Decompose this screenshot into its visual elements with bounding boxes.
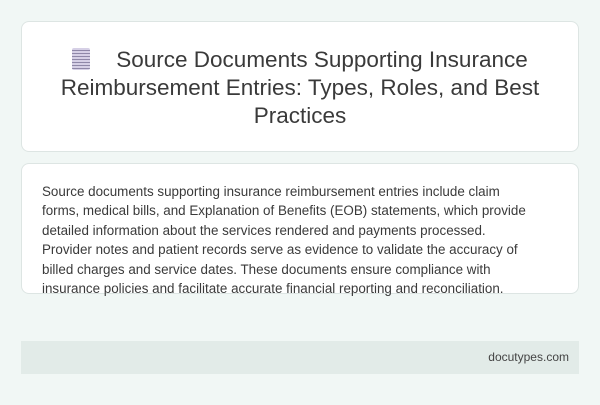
description text: detailed information about the services rendered and payments processed. [42,223,486,238]
icon: receipt [72,48,90,70]
description text [42,184,526,296]
footer [21,341,579,374]
description text: Provider notes and patient records serve as evidence to validate the accuracy of [42,242,518,257]
title: Source Documents Supporting Insurance Reimbursement Entries: Types, Roles, and Best Practices [61,47,539,128]
description text: billed charges and service dates. These documents ensure compliance with [42,262,491,277]
panel: description [21,163,579,294]
footer text: docutypes.com [488,350,569,364]
description text: Source documents supporting insurance reimbursement entries include claim [42,184,500,199]
panel: title card [21,21,579,152]
description text: forms, medical bills, and Explanation of Benefits (EOB) statements, which provide [42,203,526,218]
description text: insurance policies and facilitate accurate financial reporting and reconciliation. [42,281,504,296]
